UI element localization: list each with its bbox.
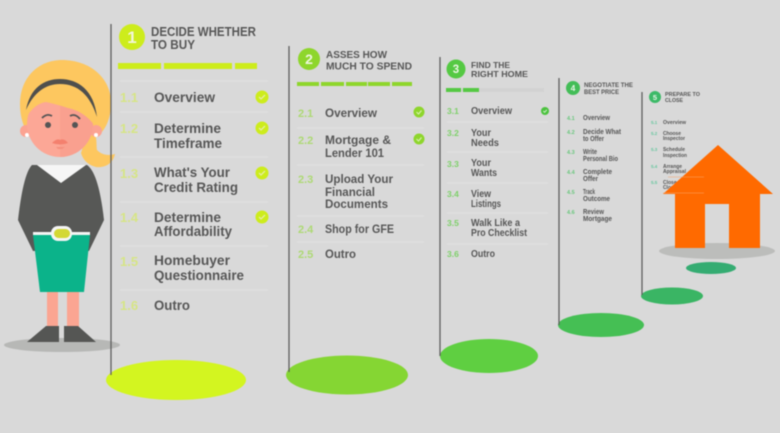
step 3 badge: 3 (453, 64, 459, 76)
step 2 items: Financial (325, 185, 375, 199)
step 4 heading: NEGOTIATE THE (584, 82, 634, 89)
step 4 items: Decide What (583, 129, 622, 136)
ears (20, 125, 32, 137)
step 2 items: Documents (325, 197, 388, 211)
step 4 numbers (567, 116, 576, 216)
step 3 numbers: 3.3 (447, 159, 459, 169)
step 3 items: Pro Checklist (471, 228, 528, 239)
step 4 items: Mortgage (583, 216, 612, 223)
step 4 badge: 4 (571, 83, 576, 93)
step 1 badge: 1 (127, 28, 137, 47)
step 2 numbers: 2.5 (298, 249, 313, 261)
step 2 numbers: 2.1 (298, 108, 313, 120)
stepping stones (106, 262, 736, 400)
step 5 numbers: 5.1 (651, 120, 658, 125)
step 5 items: Inspection (663, 153, 688, 159)
step 1 items: Overview (154, 89, 215, 105)
step 1 numbers: 1.6 (120, 298, 138, 313)
step 1 heading: DECIDE WHETHER (151, 25, 256, 39)
step 4 numbers: 4.6 (567, 210, 575, 216)
step 1 items: Homebuyer (154, 252, 231, 268)
step 1 items: What's Your (154, 164, 231, 180)
step 5 items (663, 120, 689, 191)
skirt (33, 235, 90, 292)
step 1 items: Determine (154, 120, 221, 136)
step 3 heading (471, 60, 528, 79)
step 1 numbers: 1.3 (120, 166, 138, 181)
step 2 progress (297, 82, 412, 86)
step 3 items: Your (471, 158, 491, 169)
step 4 numbers: 4.1 (567, 116, 575, 122)
step 4 items: to Offer (583, 136, 604, 143)
step 1 items: Credit Rating (154, 179, 238, 195)
step 5 numbers: 5.4 (651, 164, 658, 169)
collar (37, 165, 86, 183)
step 3 numbers: 3.6 (447, 249, 459, 259)
shoes (27, 326, 59, 342)
headband (26, 79, 97, 117)
step 2 badge: 2 (305, 51, 313, 67)
step 5 numbers (651, 120, 658, 185)
step 1 items: Affordability (154, 223, 232, 239)
ground shadow (4, 338, 120, 352)
step 5 items: Close with (663, 180, 689, 186)
eyes and brows (45, 122, 51, 128)
step 3 heading: FIND THE (471, 60, 510, 70)
step 3 items: Needs (471, 138, 499, 149)
step 1 items (154, 89, 244, 313)
hair (20, 60, 111, 134)
step 5 heading (665, 92, 701, 104)
step 5 numbers: 5.5 (651, 180, 658, 185)
step 2 items: Outro (325, 247, 356, 261)
step 4 items: Offer (583, 176, 598, 183)
step 3 items (471, 106, 528, 260)
step 2 heading: MUCH TO SPEND (326, 60, 412, 72)
step 1 heading (151, 25, 256, 52)
step 3 items: Outro (471, 249, 495, 260)
step 3 items: Your (471, 128, 491, 139)
panel: step 2 (289, 46, 424, 372)
step 1 items: Timeframe (154, 135, 222, 151)
step 2 items: Overview (325, 106, 378, 120)
step 3 progress (446, 88, 544, 92)
panel: step 4 (559, 78, 634, 325)
step 1 items: Questionnaire (154, 267, 244, 283)
step 4 numbers: 4.4 (567, 170, 576, 176)
step 5 items: Overview (663, 120, 687, 126)
step 5 numbers: 5.2 (651, 131, 658, 136)
step 3 numbers: 3.4 (447, 189, 459, 199)
step 2 items: Upload Your (325, 172, 393, 186)
step 3 items: View (471, 189, 491, 200)
woman character (4, 60, 120, 352)
step 3 numbers: 3.1 (447, 106, 459, 116)
step 2 numbers (298, 108, 314, 261)
step 1 numbers: 1.2 (120, 121, 138, 136)
step 1 items: Determine (154, 209, 221, 225)
step 5 numbers: 5.3 (651, 147, 658, 152)
mouth (52, 139, 68, 144)
step 3 numbers: 3.5 (447, 218, 459, 228)
step 1 numbers (120, 90, 139, 313)
step 5 items: Closer (663, 185, 679, 191)
step 5 items: Inspector (663, 136, 686, 142)
step 2 items (325, 106, 394, 261)
torso (18, 165, 104, 251)
step 2 numbers: 2.3 (298, 174, 313, 186)
step 3 heading: RIGHT HOME (471, 69, 528, 79)
step 3 items: Walk Like a (471, 218, 520, 229)
step 3 check (541, 107, 549, 115)
step 3 numbers (447, 106, 459, 259)
step 5 items: Choose (663, 131, 681, 137)
step 3 numbers: 3.2 (447, 128, 459, 138)
step 4 numbers: 4.5 (567, 190, 575, 196)
step 1 checks (256, 90, 268, 224)
fringe (24, 76, 100, 125)
step 5 heading: PREPARE TO (665, 92, 701, 98)
step 4 items: Review (583, 209, 604, 216)
legs (47, 290, 58, 327)
ponytail (81, 125, 115, 167)
step 3 items: Wants (471, 168, 497, 179)
house shadow (659, 243, 775, 259)
step 4 heading: BEST PRICE (584, 89, 620, 96)
face (27, 91, 93, 157)
step 4 heading (584, 82, 634, 96)
step 2 checks (414, 106, 424, 144)
step 1 badge (119, 24, 145, 50)
belt buckle (51, 226, 72, 241)
step 1 heading: TO BUY (151, 38, 196, 52)
step 4 items: Track (583, 189, 595, 196)
step 5 items: Arrange (663, 164, 682, 170)
step 4 items: Outcome (583, 196, 610, 203)
step 1 numbers: 1.4 (120, 210, 139, 225)
panel: step 1 (111, 24, 268, 375)
step 1 items: Outro (154, 297, 190, 313)
step 1 numbers: 1.1 (120, 90, 138, 105)
step 1 numbers: 1.5 (120, 254, 138, 269)
step 2 items: Shop for GFE (325, 222, 394, 236)
step 4 badge (566, 81, 580, 95)
step 3 items: Overview (471, 106, 512, 117)
step 4 items (583, 115, 622, 223)
step 4 numbers: 4.2 (567, 130, 575, 136)
panel: step 5 (642, 91, 701, 295)
step 3 items: Listings (471, 199, 501, 210)
step 5 items: Appraisal (663, 169, 686, 175)
step 4 items: Complete (583, 169, 612, 176)
step 4 items: Personal Bio (583, 156, 618, 163)
step 5 items: Schedule (663, 147, 685, 153)
step 5 badge: 5 (653, 93, 657, 102)
step 5 heading: CLOSE (665, 98, 683, 104)
step 4 numbers: 4.3 (567, 150, 575, 156)
step 4 items: Write (583, 149, 597, 156)
step 5 badge (649, 91, 661, 103)
icon: orange house (659, 145, 775, 259)
panel: step 3 (440, 57, 549, 356)
step 2 badge (298, 48, 320, 70)
step 3 badge (446, 60, 466, 78)
step 4 items: Overview (583, 115, 610, 122)
step 2 heading (326, 49, 412, 72)
step 2 items: Mortgage & (325, 133, 391, 147)
step 2 items: Lender 101 (325, 146, 384, 160)
step 2 numbers: 2.2 (298, 135, 313, 147)
step 1 progress (118, 63, 257, 69)
step 2 numbers: 2.4 (298, 224, 314, 236)
step 2 heading: ASSES HOW (326, 49, 387, 61)
